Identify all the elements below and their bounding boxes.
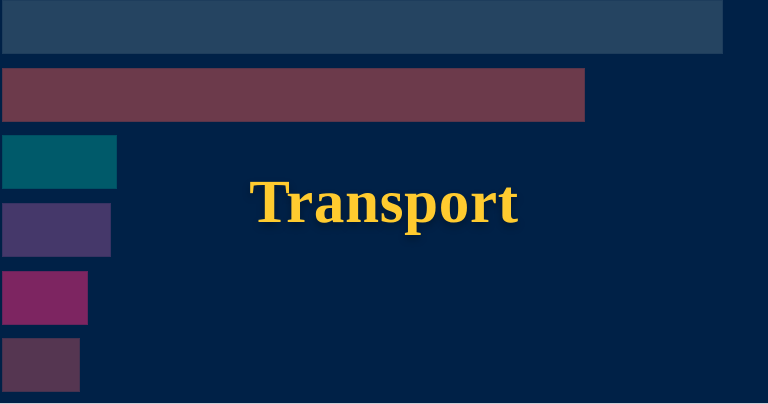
- bar 4: purple: [2, 203, 111, 257]
- bar 6: muted plum: [2, 338, 80, 392]
- bar 5: magenta: [2, 271, 88, 325]
- bar 2: muted red: [2, 68, 585, 122]
- bar 1: slate blue: [2, 0, 723, 54]
- bar 3: teal: [2, 135, 117, 189]
- title: Transport: [249, 169, 519, 236]
